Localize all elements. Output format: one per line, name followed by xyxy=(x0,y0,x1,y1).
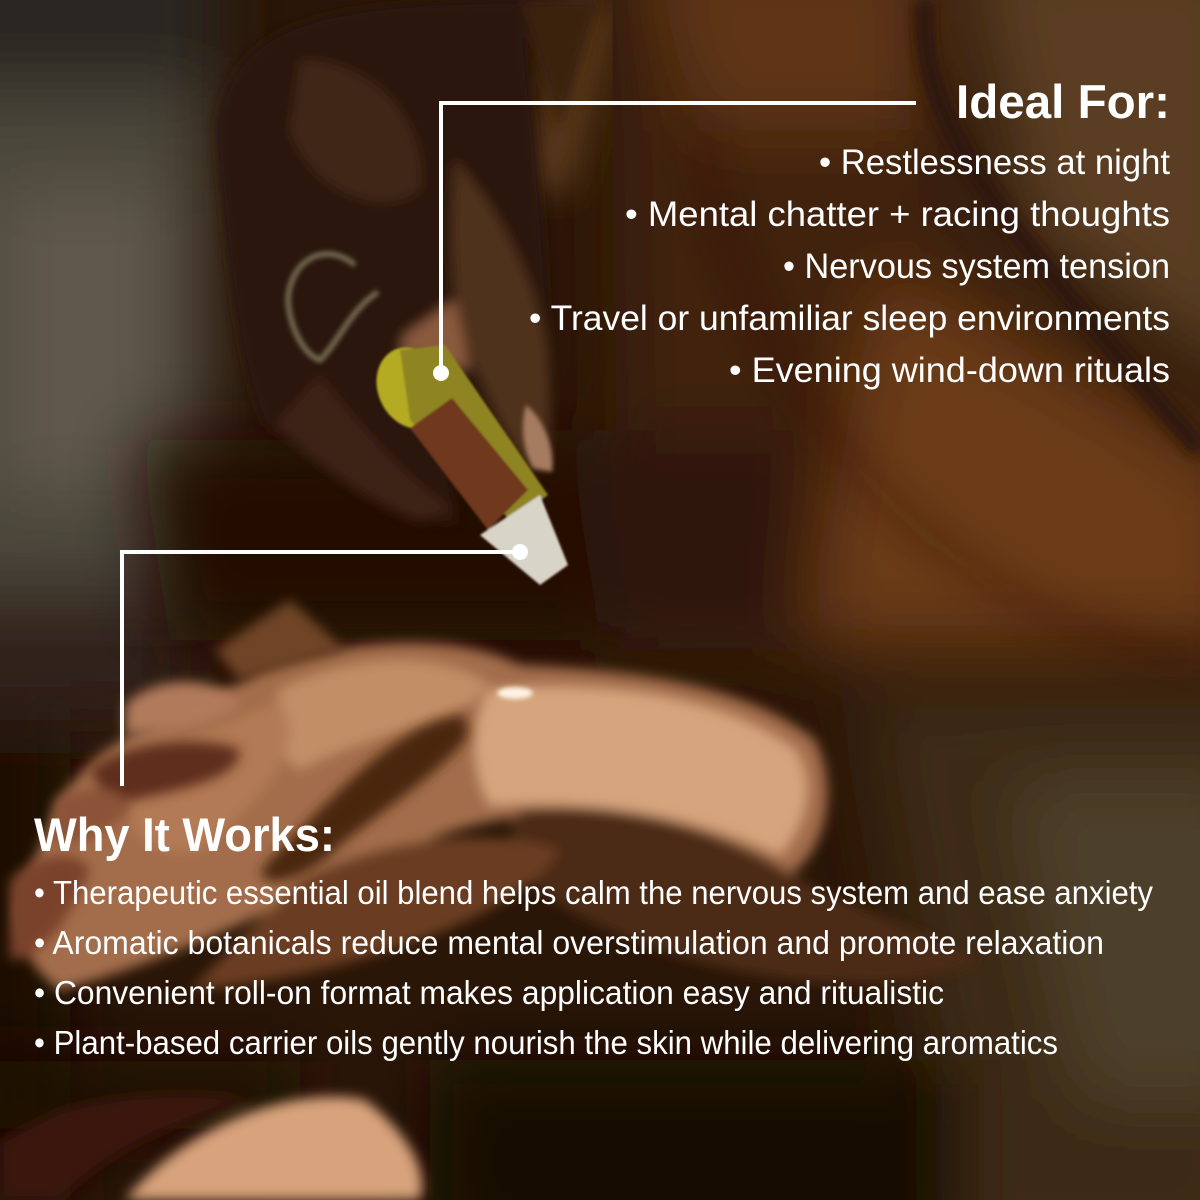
hair tie xyxy=(288,254,378,360)
list: Ideal For items: • Mental chatter + racing thoughts xyxy=(625,195,1170,234)
heading: Ideal For: Ideal For: xyxy=(956,75,1170,128)
list: Why It Works items: • Therapeutic essential oil blend helps calm the nervous system and ease anxiety xyxy=(34,874,1153,911)
list: Why It Works items: • Plant-based carrier oils gently nourish the skin while delivering aromatics xyxy=(34,1024,1058,1061)
connector line: Ideal For to bottle xyxy=(433,103,916,381)
list: Ideal For items: • Nervous system tension xyxy=(783,247,1170,286)
lower light hand and wrist xyxy=(17,643,980,990)
list: Why It Works items: • Aromatic botanicals reduce mental overstimulation and promote relaxation xyxy=(34,924,1104,961)
roller bottle xyxy=(363,336,568,585)
upper dark hand xyxy=(215,0,600,525)
left grey wall xyxy=(0,0,220,1200)
list: Ideal For items: • Restlessness at night xyxy=(819,143,1170,182)
heading: Why It Works: Why It Works: xyxy=(34,808,335,861)
list: Ideal For items: • Evening wind-down rituals xyxy=(729,351,1170,390)
list: Ideal For items: • Travel or unfamiliar sleep environments xyxy=(529,299,1170,338)
garment fold lines xyxy=(924,0,1200,450)
list: Ideal For items xyxy=(529,143,1170,390)
connector line: bottle tip to Why It Works xyxy=(122,544,528,786)
list: Why It Works items: • Convenient roll-on format makes application easy and ritualistic xyxy=(34,974,944,1011)
list: Why It Works items xyxy=(34,874,1153,1061)
